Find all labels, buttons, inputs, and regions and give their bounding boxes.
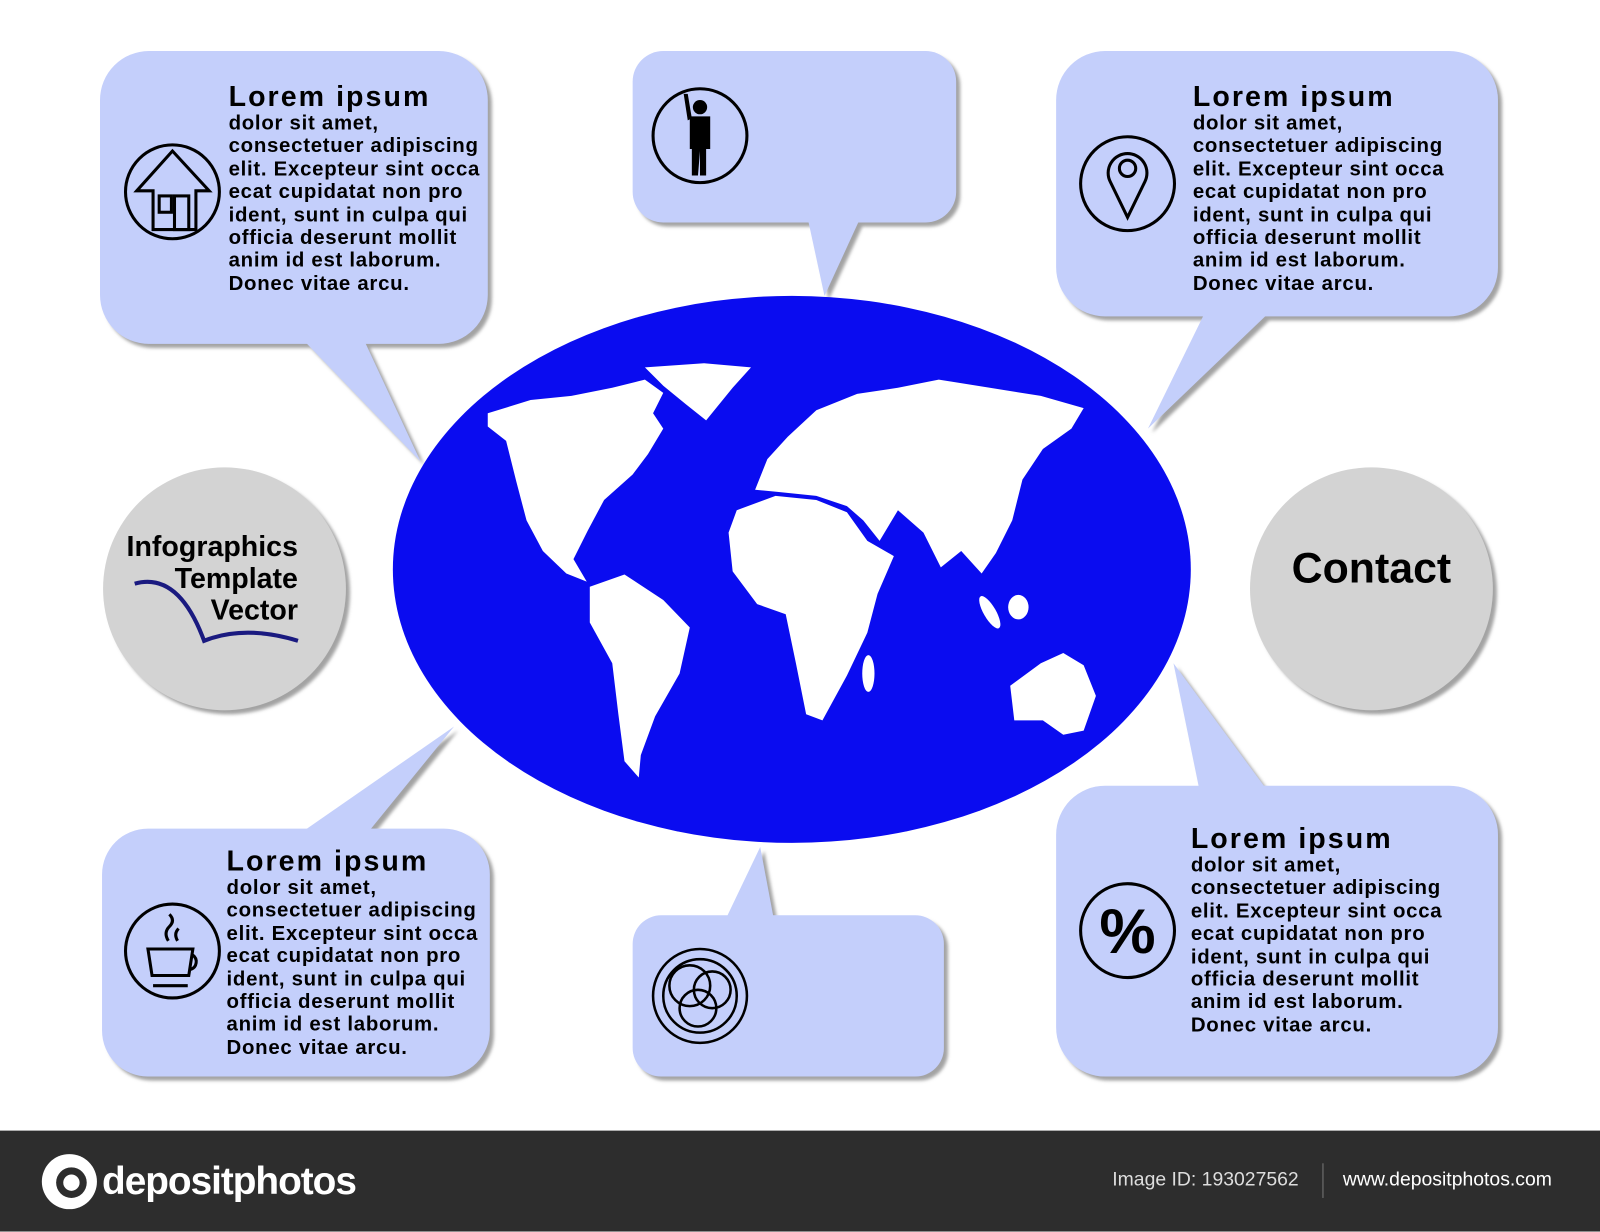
text block: bottom-left: officia deserunt mollit (227, 991, 455, 1013)
footer bar (0, 1131, 1600, 1232)
swoosh (135, 582, 298, 641)
text block: top-left: anim id est laborum. (229, 249, 441, 272)
icon: house (126, 145, 219, 239)
text block: bottom-left: ecat cupidatat non pro (227, 945, 461, 968)
text block: top-left: elit. Excepteur sint occa (229, 158, 480, 180)
footer logo: depositphotos (102, 1160, 356, 1203)
text block: top-right: anim id est laborum. (1193, 249, 1406, 272)
text block: top-right: dolor sit amet, (1193, 112, 1343, 135)
text block: bottom-left: Donec vitae arcu. (227, 1037, 408, 1059)
panel: bottom-left callout (102, 727, 490, 1077)
circle: infographics label (103, 467, 346, 710)
text block: top-left: ecat cupidatat non pro (229, 181, 463, 203)
panel: top-left callout (100, 51, 488, 461)
panel: top-right callout (1056, 51, 1498, 429)
text block: bottom-right: officia deserunt mollit (1191, 968, 1419, 991)
text block: bottom-right: Lorem ipsum (1191, 822, 1393, 854)
footer logo (42, 1154, 356, 1210)
text block: top-left: officia deserunt mollit (229, 227, 457, 249)
text block: bottom-right: consectetuer adipiscing (1191, 877, 1441, 899)
footer image id: Image ID: 193027562 (1112, 1169, 1299, 1191)
icon: percent (1081, 884, 1174, 978)
text block: top-right: officia deserunt mollit (1193, 227, 1421, 249)
heading: infographics template vector (127, 531, 298, 626)
text block: top-right: elit. Excepteur sint occa (1193, 158, 1444, 180)
text block: bottom-right: ident, sunt in culpa qui (1191, 946, 1430, 968)
text block: bottom-left: elit. Excepteur sint occa (227, 922, 478, 945)
circle: contact (1250, 467, 1493, 710)
text block: top-right: Lorem ipsum (1193, 81, 1395, 112)
text block: bottom-right: elit. Excepteur sint occa (1191, 900, 1442, 922)
heading: infographics template vector: Vector (211, 594, 298, 626)
text block: bottom-left: ident, sunt in culpa qui (227, 968, 466, 990)
panel: bottom-right callout (1056, 663, 1498, 1077)
panel: top-middle callout (633, 51, 956, 296)
text block: bottom-left: consectetuer adipiscing (227, 899, 477, 922)
icon: location pin (1081, 137, 1174, 231)
text block: bottom-right (1191, 822, 1442, 1037)
text block: bottom-left: anim id est laborum. (227, 1014, 439, 1036)
text block: top-right: Donec vitae arcu. (1193, 272, 1374, 295)
text block: bottom-right: anim id est laborum. (1191, 991, 1404, 1014)
icon: circles logo (653, 949, 747, 1043)
text block: top-right: ecat cupidatat non pro (1193, 181, 1427, 203)
text block: bottom-left (227, 845, 478, 1059)
text block: top-right: consectetuer adipiscing (1193, 135, 1443, 158)
text block: bottom-right: dolor sit amet, (1191, 854, 1341, 877)
heading: contact: Contact (1292, 544, 1451, 592)
heading: infographics template vector: Infographics (127, 531, 298, 562)
icon: percent: % (1099, 897, 1156, 967)
text block: bottom-right: Donec vitae arcu. (1191, 1014, 1372, 1037)
text block: top-right: ident, sunt in culpa qui (1193, 204, 1432, 226)
text block: top-left: Lorem ipsum (229, 81, 430, 112)
text block: top-left: dolor sit amet, (229, 112, 379, 135)
icon: coffee cup (126, 904, 219, 998)
text block: top-left: ident, sunt in culpa qui (229, 204, 468, 226)
text block: top-left (229, 81, 480, 295)
text block: bottom-left: dolor sit amet, (227, 877, 377, 899)
text block: top-right (1193, 81, 1444, 295)
text block: bottom-right: ecat cupidatat non pro (1191, 923, 1425, 945)
text block: bottom-left: Lorem ipsum (227, 845, 428, 877)
footer url: www.depositphotos.com (1343, 1169, 1552, 1191)
text block: top-left: Donec vitae arcu. (229, 272, 410, 295)
globe with world map (393, 296, 1191, 843)
heading: infographics template vector: Template (175, 562, 298, 594)
text block: top-left: consectetuer adipiscing (229, 135, 479, 158)
icon: person (653, 89, 747, 183)
panel: bottom-middle callout (633, 847, 944, 1077)
